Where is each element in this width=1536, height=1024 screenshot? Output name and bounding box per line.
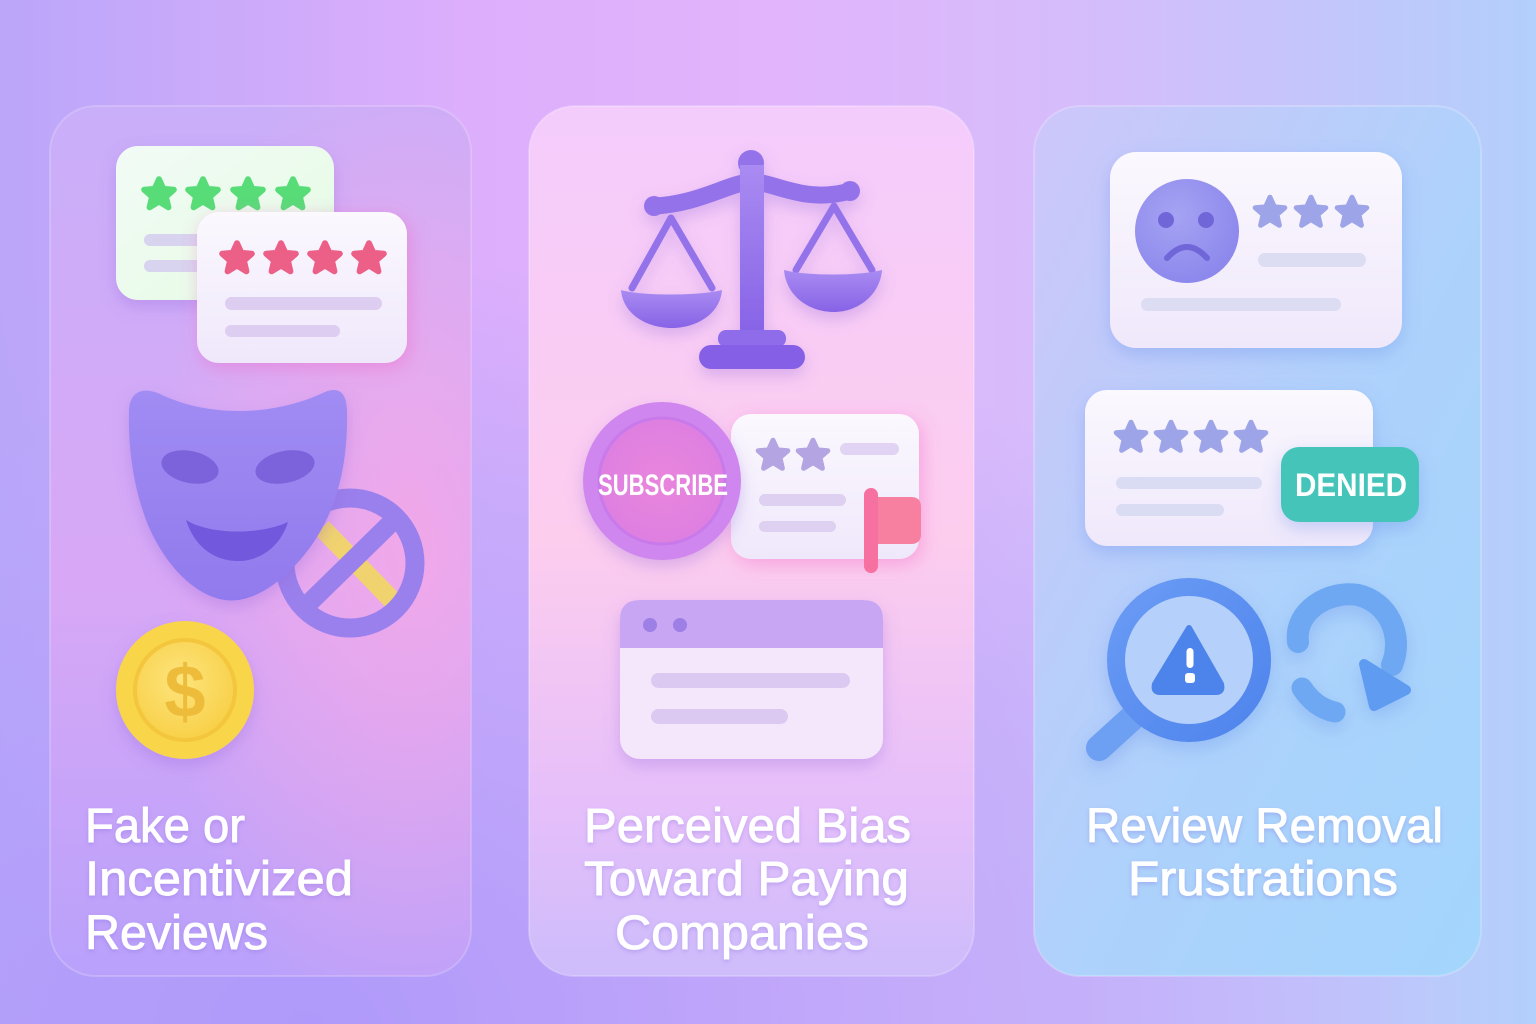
heading xyxy=(85,800,353,960)
badge: denied: DENIED xyxy=(1295,467,1407,503)
card: sad face review xyxy=(1110,152,1402,348)
icon: dollar coin: $ xyxy=(164,650,206,733)
icon: subscribe badge: SUBSCRIBE xyxy=(598,469,728,502)
icon: theater mask xyxy=(129,390,347,600)
icon: balance scale xyxy=(621,150,882,369)
heading: Reviews xyxy=(85,907,268,960)
icon: browser window xyxy=(620,600,883,759)
card: green star review xyxy=(116,146,334,300)
icon: dollar coin xyxy=(116,621,254,759)
panel: perceived bias xyxy=(529,106,974,976)
icon: prohibition sign xyxy=(285,498,415,628)
icon: sad face xyxy=(1135,179,1239,283)
heading: Perceived Bias xyxy=(584,800,911,853)
panel: fake or incentivized reviews xyxy=(50,106,471,976)
heading: Frustrations xyxy=(1128,853,1398,906)
heading: Toward Paying xyxy=(584,853,909,906)
icon: circular arrow xyxy=(1298,594,1406,712)
panel: review removal xyxy=(1034,106,1481,976)
card: four star review xyxy=(1085,390,1373,546)
card: two star review xyxy=(731,414,919,559)
card: red star review xyxy=(197,212,407,363)
heading: Fake or xyxy=(85,800,245,853)
heading xyxy=(1086,800,1443,906)
heading: Companies xyxy=(615,907,869,960)
heading: Incentivized xyxy=(85,853,353,906)
icon: subscribe badge xyxy=(583,402,741,560)
heading xyxy=(584,800,911,960)
icon: magnifier with warning xyxy=(1099,587,1262,748)
heading: Review Removal xyxy=(1086,800,1443,853)
badge: denied xyxy=(1281,447,1419,522)
icon: pink flag xyxy=(864,488,921,573)
